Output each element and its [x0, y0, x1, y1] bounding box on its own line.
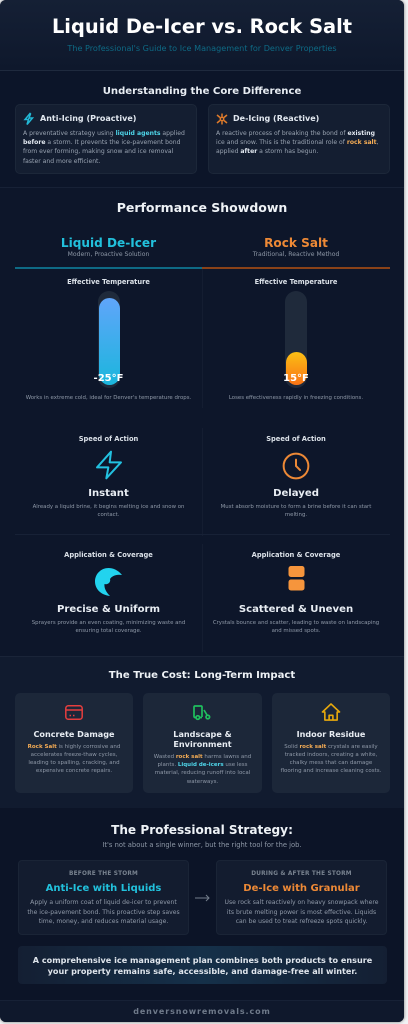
metric: salt temperature [229, 278, 363, 401]
panel heading: Indoor Residue [297, 728, 365, 738]
temperature value: -25°F [94, 373, 123, 384]
section: professional strategy [0, 808, 404, 1000]
thermometer [98, 291, 120, 388]
panel: before the storm [18, 860, 189, 935]
panel text: expensive concrete repairs. [36, 768, 112, 774]
panel text: Wasted rock salt harms lawns and [154, 754, 251, 760]
panel heading: De-Icing (Reactive) [233, 114, 319, 123]
title: Liquid De-Icer vs. Rock Salt [52, 15, 352, 38]
section heading: Understanding the Core Difference [103, 86, 301, 96]
panel text [216, 130, 379, 155]
panel text: from ever forming, making snow and ice removal [23, 148, 173, 155]
panel text: material, reducing runoff into local [155, 770, 250, 776]
panel text: tracked indoors, creating a white, [285, 752, 377, 758]
header [0, 0, 404, 71]
metric: liquid application [32, 551, 185, 634]
panel text: accelerates freeze-thaw cycles, [31, 752, 117, 758]
metric: salt speed [221, 435, 372, 518]
thermometer [285, 291, 307, 388]
metric note [32, 620, 185, 634]
icon: house [322, 703, 340, 721]
icon: clock [282, 452, 310, 480]
panel heading: De-Ice with Granular [243, 882, 360, 894]
section: true cost [0, 657, 404, 808]
column header: rock salt: Traditional, Reactive Method [253, 251, 339, 258]
metric note: Sprayers provide an even coating, minimizing waste and [32, 620, 185, 626]
metric note: melting. [285, 512, 307, 518]
panel heading: Concrete Damage [33, 728, 115, 738]
panel text: can be used to treat refreeze spots quickly. [236, 918, 367, 925]
panel text: before a storm. It prevents the ice-pavement bond [23, 139, 181, 146]
panel text: flooring and increase cleaning costs. [281, 768, 381, 774]
metric: liquid temperature [26, 278, 191, 401]
section: core difference [0, 71, 404, 188]
callout text: A comprehensive ice management plan combines both products to ensure [33, 954, 372, 964]
metric note: ensuring total coverage. [75, 628, 142, 634]
metric value: Precise & Uniform [57, 604, 160, 615]
metric label: Speed of Action [266, 435, 326, 443]
panel text: Apply a uniform coat of liquid de-icer to prevent [30, 899, 177, 906]
metric note: Works in extreme cold, ideal for Denver's temperature drops. [26, 395, 191, 401]
panel text: the ice-pavement bond. This proactive step saves [27, 908, 180, 916]
panel eyebrow: DURING & AFTER THE STORM [251, 870, 352, 876]
icon: bolt [24, 112, 34, 125]
section heading: The Professional Strategy: [111, 823, 293, 837]
metric label: Application & Coverage [64, 551, 153, 559]
metric label: Effective Temperature [255, 278, 337, 286]
callout text: your property remains safe, accessible, and damage-free all winter. [48, 966, 357, 976]
panel text: waterways. [187, 779, 218, 785]
metric value: Instant [88, 488, 129, 499]
metric: salt application [213, 551, 379, 634]
panel text [280, 744, 381, 774]
panel text [28, 744, 120, 774]
panel text: chalky mess that can damage [290, 760, 372, 766]
panel text: A preventative strategy using liquid agents applied [23, 130, 185, 136]
metric value: Delayed [273, 488, 319, 499]
panel text: faster and more efficient. [23, 158, 100, 165]
icon: spray [95, 568, 122, 596]
metric note [221, 504, 372, 518]
panel text: applied after a storm has begun. [216, 148, 318, 155]
thermometer fill [98, 298, 120, 385]
metric: liquid speed [32, 435, 184, 518]
icon: stacked blocks [288, 566, 304, 590]
panel heading: Landscape & [173, 728, 232, 738]
metric note: Loses effectiveness rapidly in freezing conditions. [229, 395, 363, 401]
panel: concrete damage [15, 693, 133, 793]
panel text [23, 130, 185, 165]
metric note: and missed spots. [272, 628, 320, 634]
metric note: Must absorb moisture to form a brine before it can start [221, 504, 371, 510]
panel text [27, 899, 180, 925]
metric label: Speed of Action [79, 435, 138, 443]
panel heading: Anti-Icing (Proactive) [40, 114, 136, 123]
footer [0, 1000, 404, 1023]
temperature value: 15°F [283, 373, 309, 384]
section subheading: It's not about a single winner, but the right tool for the job. [102, 840, 302, 848]
panel text: leading to spalling, cracking, and [28, 760, 120, 766]
icon: lightning [96, 450, 122, 480]
metric note [32, 504, 184, 518]
column header: rock salt: Rock Salt [264, 236, 328, 250]
subtitle: The Professional's Guide to Ice Management for Denver Properties [67, 43, 337, 53]
panel text: Rock Salt is highly corrosive and [28, 744, 120, 750]
panel heading: Environment [173, 739, 232, 749]
panel text: plants. Liquid de-icers use less [157, 762, 248, 768]
column header: liquid de-icer: Modern, Proactive Solution [68, 251, 149, 258]
metric label: Application & Coverage [252, 551, 340, 559]
section: performance showdown [0, 188, 404, 657]
panel text: time, money, and reduces material usage. [39, 918, 168, 925]
arrow [195, 894, 210, 902]
panel text: ice and snow. This is the traditional role of rock salt, [216, 139, 379, 146]
metric note: Already a liquid brine, it begins melting ice and snow on [33, 504, 184, 510]
panel text: Use rock salt reactively on heavy snowpack where [225, 899, 378, 906]
panel text [154, 754, 251, 785]
metric value: Scattered & Uneven [239, 604, 353, 615]
panel text: its brute melting power is most effective. Liquids [227, 908, 376, 916]
panel: during and after [216, 860, 387, 935]
grid lines [202, 269, 203, 408]
icon: cart [193, 705, 210, 720]
callout text [32, 954, 372, 976]
column header: liquid de-icer [61, 236, 156, 258]
panel: anti-icing [15, 104, 197, 174]
metric note [213, 620, 379, 634]
panel: de-icing [208, 104, 390, 174]
metric note: contact. [98, 512, 119, 518]
section heading: Performance Showdown [117, 200, 287, 214]
panel heading [173, 728, 232, 749]
callout [18, 946, 387, 984]
icon: burst [216, 114, 228, 124]
column header: liquid de-icer: Liquid De-Icer [61, 236, 156, 250]
panel: landscape [143, 693, 262, 793]
panel text: Solid rock salt crystals are easily [284, 744, 378, 750]
metric note: Crystals bounce and scatter, leading to waste on landscaping [213, 620, 379, 626]
panel text [225, 899, 378, 925]
panel eyebrow: BEFORE THE STORM [69, 870, 138, 876]
icon: card [65, 705, 83, 720]
divider bars [15, 267, 202, 269]
panel heading: Anti-Ice with Liquids [46, 882, 161, 894]
metric label: Effective Temperature [67, 278, 150, 286]
section heading: The True Cost: Long-Term Impact [109, 670, 295, 681]
panel: indoor residue [272, 693, 390, 793]
column header: rock salt [252, 236, 339, 258]
panel text: A reactive process of breaking the bond of existing [216, 130, 375, 136]
footer url: denversnowremovals.com [133, 1007, 271, 1016]
thermometer fill [286, 352, 306, 385]
